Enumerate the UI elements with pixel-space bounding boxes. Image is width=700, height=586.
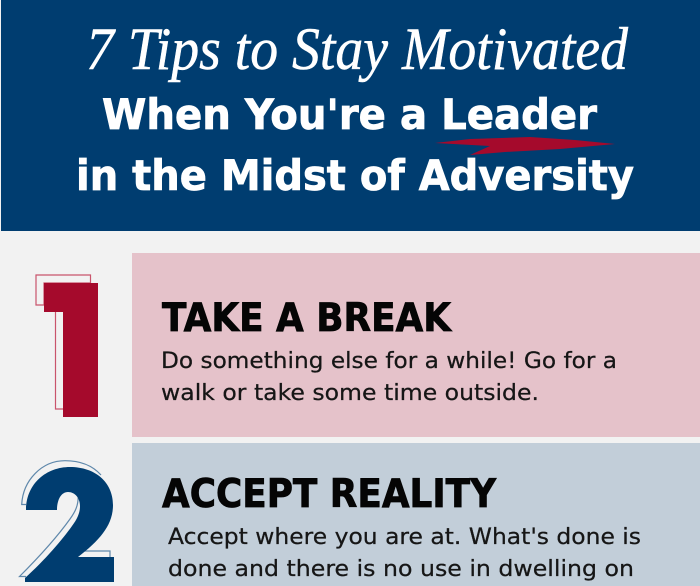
tip 1 heading: TAKE A BREAK (162, 296, 453, 341)
panel: tip 2 (132, 443, 700, 586)
tip 1 body text (161, 348, 617, 406)
red brush underline (435, 137, 615, 155)
tip 1 body text: Do something else for a while! Go for a (161, 348, 617, 374)
tip 2 body text (168, 524, 641, 582)
tip 2 body text: done and there is no use in dwelling on (168, 556, 634, 582)
subtitle line 1: When You're a Leader (102, 90, 597, 139)
title: script line: 7 Tips to Stay Motivated (86, 16, 629, 82)
tip 2 heading: ACCEPT REALITY (162, 472, 497, 517)
tip 1 body text: walk or take some time outside. (161, 380, 539, 406)
number 1 (36, 275, 98, 417)
tip 2 body text: Accept where you are at. What's done is (168, 524, 641, 550)
header banner (1, 0, 700, 231)
subtitle line 2: in the Midst of Adversity (76, 151, 634, 200)
panel: tip 1 (132, 253, 700, 437)
number 2 (20, 461, 114, 582)
